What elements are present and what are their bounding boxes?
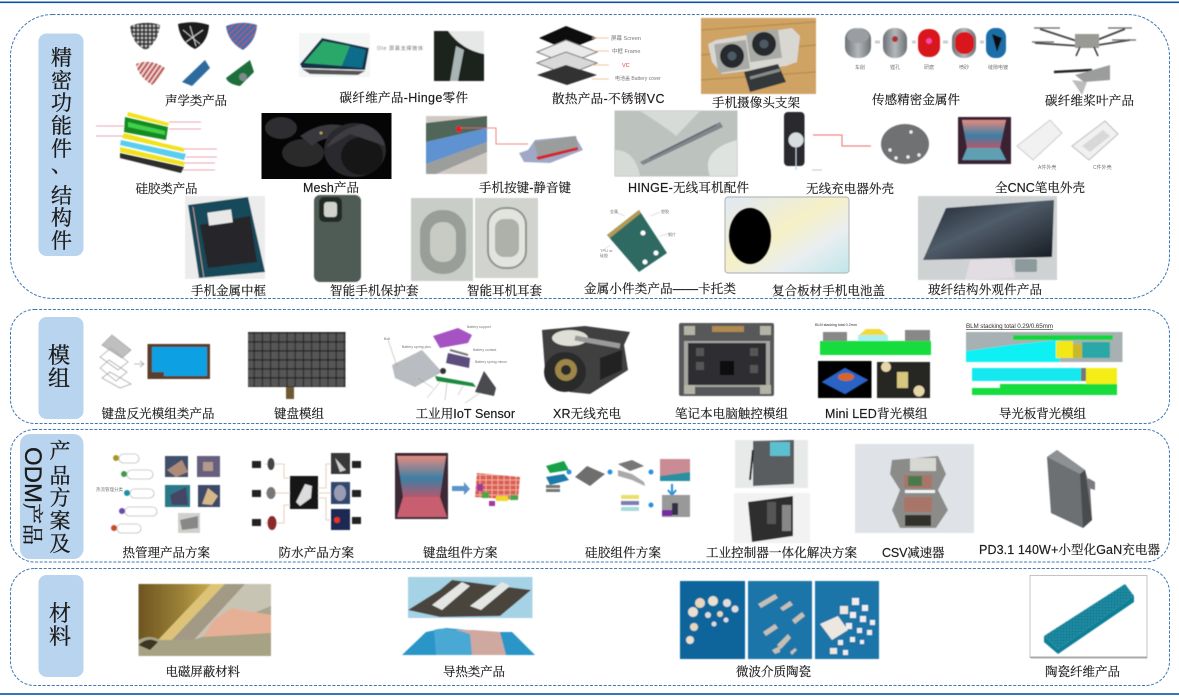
product: sensor precision metal parts: 车削 xyxy=(855,64,865,71)
product: heat dissipation stainless VC xyxy=(537,26,664,106)
product: small metal parts SIM tray xyxy=(584,208,736,296)
product: small metal parts SIM tray: 金属小件类产品——卡托类 xyxy=(584,281,736,296)
product: full CNC laptop housing xyxy=(958,117,1118,195)
product: waterproof solution: 防水产品方案 xyxy=(278,545,354,560)
product: phone camera bracket xyxy=(701,18,816,110)
bottom rule xyxy=(0,693,1179,695)
product: silicone: 硅胶类产品 xyxy=(136,181,198,196)
product: Mini LED backlight module xyxy=(815,323,931,421)
product: composite phone battery cover: 复合板材手机电池盖 xyxy=(772,283,885,298)
panel: product solutions and ODM products xyxy=(10,430,1170,562)
product: carbon fibre propeller blades xyxy=(1032,28,1136,108)
product: composite phone battery cover xyxy=(725,197,885,298)
product: keyboard module: 键盘模组 xyxy=(274,406,324,421)
product: sensor precision metal parts: 喷砂 xyxy=(959,64,969,71)
side label: precision parts xyxy=(38,34,84,256)
product: thermal conductive material: 导热类产品 xyxy=(443,664,505,679)
panel: modules xyxy=(10,310,1170,424)
panel: materials xyxy=(10,568,1170,686)
side label: precision parts: 密 xyxy=(51,70,72,93)
side label: materials: 材 xyxy=(49,601,71,626)
side label: solutions and ODM: 案 xyxy=(50,510,70,533)
product: industrial IoT sensor: 工业用IoT Sensor xyxy=(416,407,515,421)
panel: precision functional and structural parts xyxy=(10,14,1170,298)
side label: precision parts: 结 xyxy=(51,185,72,208)
side label: materials: 料 xyxy=(49,624,71,649)
product: thermal management solution: 热流管理分类 xyxy=(96,486,123,493)
product: phone metal middle frame xyxy=(185,196,266,298)
product: industrial IoT sensor: Bolt xyxy=(384,337,390,341)
product: thermal management solution: 热管理产品方案 xyxy=(122,545,210,560)
product: CSV reducer: CSV减速器 xyxy=(882,545,945,560)
product: industrial IoT sensor xyxy=(384,325,515,421)
product: smartphone case: 智能手机保护套 xyxy=(330,283,419,298)
product: sensor precision metal parts: 缝隙电镀 xyxy=(988,64,1008,71)
product: Mini LED backlight module: BLM stacking total 0.2mm xyxy=(815,323,857,327)
product: keyboard module xyxy=(248,332,346,421)
product: keyboard assembly solution xyxy=(395,453,520,560)
product: smartphone case xyxy=(314,195,419,298)
product: full CNC laptop housing: 全CNC笔电外壳 xyxy=(995,180,1085,195)
product: EMI shielding material: 电磁屏蔽材料 xyxy=(166,664,240,679)
product: industrial IoT sensor: Battery support xyxy=(467,325,491,329)
product: carbon fibre hinge parts: 碳纤维产品-Hinge零件 xyxy=(340,90,468,105)
product: light guide plate backlight module xyxy=(966,323,1122,421)
product: heat dissipation stainless VC: 中框 Frame xyxy=(612,47,640,55)
product: wireless charger housing: 无线充电器外壳 xyxy=(806,181,894,196)
product: wireless charger housing xyxy=(784,112,929,196)
product: industrial controller integrated solution: 工业控制器一体化解决方案 xyxy=(706,545,857,560)
side label: modules: 模 xyxy=(48,343,70,368)
product: keyboard reflective module: 键盘反光模组类产品 xyxy=(102,406,214,421)
side label: precision parts: 、 xyxy=(51,154,72,177)
product: sensor precision metal parts xyxy=(845,28,1008,107)
side label: precision parts: 精 xyxy=(51,47,72,70)
side label: precision parts: 件 xyxy=(51,230,72,253)
product: heat dissipation stainless VC: 电池盖 Battery cover xyxy=(615,75,661,82)
side label: modules: 组 xyxy=(48,366,70,391)
side label: solutions and ODM: ODM 产品 xyxy=(19,447,46,545)
product: industrial IoT sensor: Battery spring minus xyxy=(475,360,507,364)
product: acoustic: 声学类产品 xyxy=(165,93,227,108)
product: notebook touchpad module xyxy=(675,323,788,421)
product: Mini LED backlight module: Mini LED背光模组 xyxy=(825,406,928,421)
product: industrial controller integrated solution xyxy=(706,440,857,560)
product: XR wireless charging: XR无线充电 xyxy=(553,406,621,421)
side label: solutions and ODM: 及 xyxy=(50,533,70,556)
product: glass fibre structure exterior: 玻纤结构外观件产品 xyxy=(928,282,1042,297)
product: heat dissipation stainless VC: 散热产品-不锈钢VC xyxy=(552,91,664,106)
product: full CNC laptop housing: C件外壳 xyxy=(1093,164,1112,171)
product: small metal parts SIM tray: 塑胶 xyxy=(661,208,669,214)
side label: solutions and ODM xyxy=(19,434,84,559)
product: light guide plate backlight module: BLM stacking total 0.29/0.65mm xyxy=(966,323,1053,330)
product: mesh earbuds xyxy=(262,113,392,195)
product: phone metal middle frame: 手机金属中框 xyxy=(191,283,266,298)
product: keyboard assembly solution: 键盘组件方案 xyxy=(423,545,498,560)
product: heat dissipation stainless VC: VC xyxy=(622,63,630,69)
product: small metal parts SIM tray: 硅胶 xyxy=(600,252,608,258)
product: full CNC laptop housing: A件外壳 xyxy=(1038,164,1056,171)
product: thermal management solution xyxy=(96,454,220,560)
product: CSV reducer xyxy=(855,444,974,560)
product: smart headphone ear pads xyxy=(411,198,542,298)
product: light guide plate backlight module: 导光板背光模组 xyxy=(999,406,1086,421)
product: glass fibre structure exterior xyxy=(918,196,1057,297)
product: industrial IoT sensor: Battery contact xyxy=(473,348,496,352)
product: heat dissipation stainless VC: 屏幕 Screen xyxy=(611,34,641,42)
side label: solutions and ODM: 品 xyxy=(50,465,70,488)
product: EMI shielding material xyxy=(138,584,271,679)
product: microwave dielectric ceramics xyxy=(680,581,879,679)
product: PD3.1 GaN charger: PD3.1 140W+小型化GaN充电器 xyxy=(979,542,1160,557)
product: carbon fibre propeller blades: 碳纤维桨叶产品 xyxy=(1045,93,1134,108)
product: phone mute key: 手机按键-静音键 xyxy=(479,180,571,195)
side label: precision parts: 件 xyxy=(51,138,72,161)
product: small metal parts SIM tray: 钢片 xyxy=(668,231,676,237)
product: mesh earbuds: Mesh产品 xyxy=(303,180,359,195)
side label: solutions and ODM: 方 xyxy=(50,487,70,510)
product: silicone assembly solution: 硅胶组件方案 xyxy=(585,545,661,560)
product: phone camera bracket: 手机摄像头支架 xyxy=(712,95,800,110)
product: hinge wireless earphone parts xyxy=(614,110,749,195)
product: silicone assembly solution xyxy=(546,459,690,560)
product: acoustic xyxy=(130,22,257,108)
product: sensor precision metal parts: 传感精密金属件 xyxy=(872,92,960,107)
product: hinge wireless earphone parts: HINGE-无线耳机配件 xyxy=(628,180,749,195)
side label: modules xyxy=(38,317,84,419)
product: carbon fibre hinge parts xyxy=(299,31,484,105)
product: XR wireless charging xyxy=(542,326,630,421)
product: phone mute key xyxy=(426,116,583,195)
product: small metal parts SIM tray: TPU or xyxy=(600,248,613,253)
product: smart headphone ear pads: 智能耳机耳套 xyxy=(467,283,542,298)
side label: materials xyxy=(38,575,84,677)
product: carbon fibre hinge parts: Ole 屏幕支撑微体 xyxy=(377,45,423,52)
side label: precision parts: 能 xyxy=(51,115,72,138)
product: sensor precision metal parts: 研磨 xyxy=(924,64,934,71)
product: sensor precision metal parts: 镗孔 xyxy=(890,64,900,71)
side label: precision parts: 构 xyxy=(51,207,72,230)
product: microwave dielectric ceramics: 微波介质陶瓷 xyxy=(736,664,811,679)
product: PD3.1 GaN charger xyxy=(979,450,1160,557)
product: waterproof solution xyxy=(252,453,361,560)
product: keyboard reflective module xyxy=(100,335,214,421)
product: notebook touchpad module: 笔记本电脑触控模组 xyxy=(675,406,788,421)
side label: precision parts: 功 xyxy=(51,92,72,115)
product: silicone xyxy=(96,112,217,196)
top rule xyxy=(0,2,1179,3)
product: industrial IoT sensor: Battery spring plus xyxy=(402,345,431,349)
side label: solutions and ODM: 产 xyxy=(50,440,70,463)
product: thermal conductive material xyxy=(402,577,535,679)
product: ceramic fibre: 陶瓷纤维产品 xyxy=(1045,664,1120,679)
product: small metal parts SIM tray: 金属 xyxy=(610,208,618,214)
product: ceramic fibre xyxy=(1030,576,1147,679)
